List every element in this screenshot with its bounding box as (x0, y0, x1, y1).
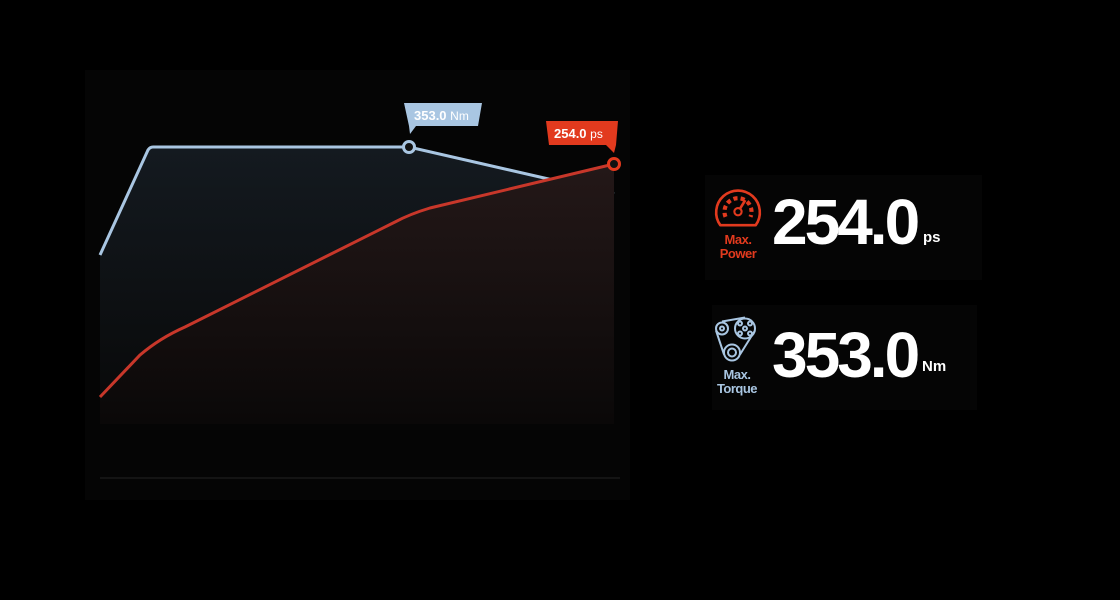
power area (100, 164, 614, 424)
label: Power (720, 246, 756, 261)
stat: max torque (712, 305, 977, 410)
torque area (100, 147, 614, 424)
stat: max torque: Nm (922, 358, 946, 375)
value: 353.0 (772, 319, 917, 391)
label (720, 232, 757, 261)
label (717, 367, 757, 396)
value: 254.0 (772, 186, 917, 258)
stat: max power: ps (923, 229, 941, 246)
power marker (546, 121, 620, 170)
label: Max. (724, 367, 750, 382)
baseline (100, 477, 620, 479)
torque marker (404, 103, 482, 152)
label: Max. (725, 232, 751, 247)
power marker: 254.0 ps (554, 126, 603, 141)
label: Torque (717, 381, 757, 396)
icon: speedometer (714, 189, 762, 226)
torque marker: 353.0 Nm (414, 108, 469, 123)
icon: belt pulleys (715, 316, 756, 362)
stat: max power (705, 175, 982, 280)
